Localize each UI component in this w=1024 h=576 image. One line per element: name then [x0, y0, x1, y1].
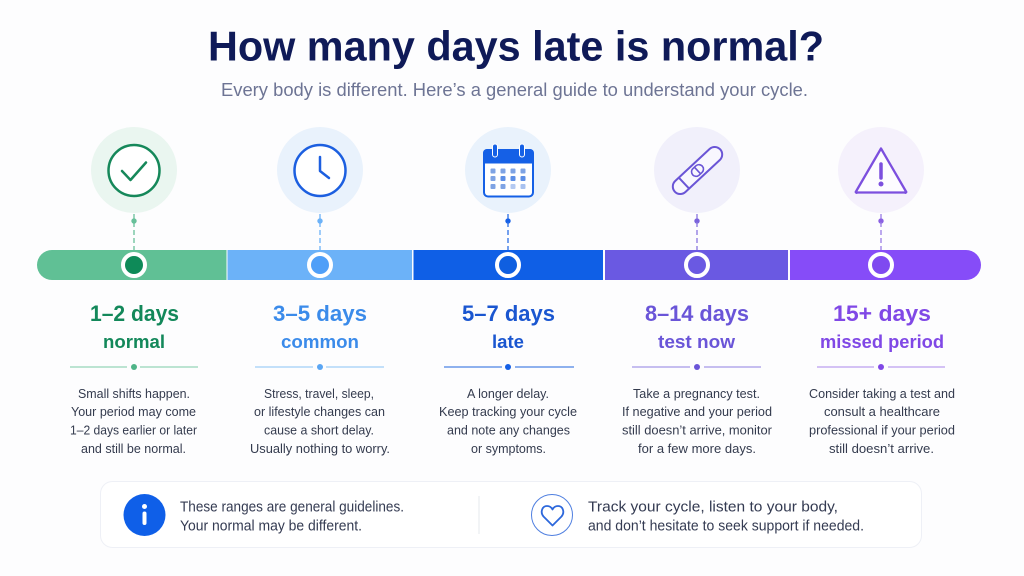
connector [317, 214, 323, 250]
description: Consider taking a test and [809, 387, 955, 401]
description: or lifestyle changes can [254, 405, 385, 419]
support note [588, 500, 864, 534]
label: missed period [820, 332, 944, 352]
description [70, 387, 197, 456]
guideline note: Your normal may be different. [180, 518, 362, 534]
connector [878, 214, 884, 250]
description: or symptoms. [471, 442, 546, 456]
node [497, 254, 519, 276]
description: Keep tracking your cycle [439, 405, 577, 419]
divider [817, 364, 945, 370]
description: A longer delay. [467, 387, 549, 401]
connector [505, 214, 511, 250]
column: 3-5 days [250, 127, 390, 456]
column: 15+ days [809, 127, 955, 456]
heading: 1–2 days [90, 301, 179, 326]
icon: heart [532, 494, 572, 536]
description: still doesn’t arrive. [829, 442, 934, 456]
title: How many days late is normal? [208, 22, 824, 70]
description: Take a pregnancy test. [633, 387, 760, 401]
icon: check mark [91, 127, 177, 213]
description: Usually nothing to worry. [250, 442, 390, 456]
heading: 8–14 days [645, 301, 749, 326]
divider [444, 364, 574, 370]
description: still doesn’t arrive, monitor [622, 424, 772, 438]
label: common [281, 332, 359, 352]
icon: info [124, 494, 166, 536]
description: 1–2 days earlier or later [70, 424, 197, 438]
support note: and don’t hesitate to seek support if needed. [588, 518, 864, 534]
label: late [492, 332, 524, 352]
description: and still be normal. [81, 442, 186, 456]
column: 8-14 days [622, 127, 772, 456]
node [123, 254, 145, 276]
description: If negative and your period [622, 405, 772, 419]
icon: clock [277, 127, 363, 213]
divider [70, 364, 198, 370]
node [870, 254, 892, 276]
description [622, 387, 772, 456]
description [439, 387, 577, 456]
heading: 3–5 days [273, 301, 367, 326]
icon: calendar [465, 127, 551, 213]
description: for a few more days. [638, 442, 756, 456]
footer panel [100, 482, 922, 548]
timeline bar [37, 250, 981, 280]
description [250, 387, 390, 456]
node [309, 254, 331, 276]
connector [694, 214, 700, 250]
description: consult a healthcare [824, 405, 940, 419]
label: normal [103, 332, 165, 352]
description: Small shifts happen. [78, 387, 190, 401]
guideline note: These ranges are general guidelines. [180, 500, 404, 516]
description: professional if your period [809, 424, 955, 438]
label: test now [658, 332, 736, 352]
icon: pregnancy test [654, 127, 740, 213]
guideline note [180, 500, 404, 534]
node [686, 254, 708, 276]
connector [131, 214, 137, 250]
description: Your period may come [71, 405, 196, 419]
support note: Track your cycle, listen to your body, [588, 500, 838, 516]
description: and note any changes [447, 424, 570, 438]
icon: warning triangle [838, 127, 924, 213]
subtitle: Every body is different. Here’s a general guide to understand your cycle. [221, 80, 808, 100]
heading: 15+ days [833, 301, 931, 326]
description [809, 387, 955, 456]
divider [255, 364, 384, 370]
description: Stress, travel, sleep, [264, 387, 374, 401]
description: cause a short delay. [264, 424, 374, 438]
column: 1-2 days [70, 127, 198, 456]
heading: 5–7 days [462, 301, 555, 326]
divider [632, 364, 761, 370]
column: 5-7 days [439, 127, 577, 456]
